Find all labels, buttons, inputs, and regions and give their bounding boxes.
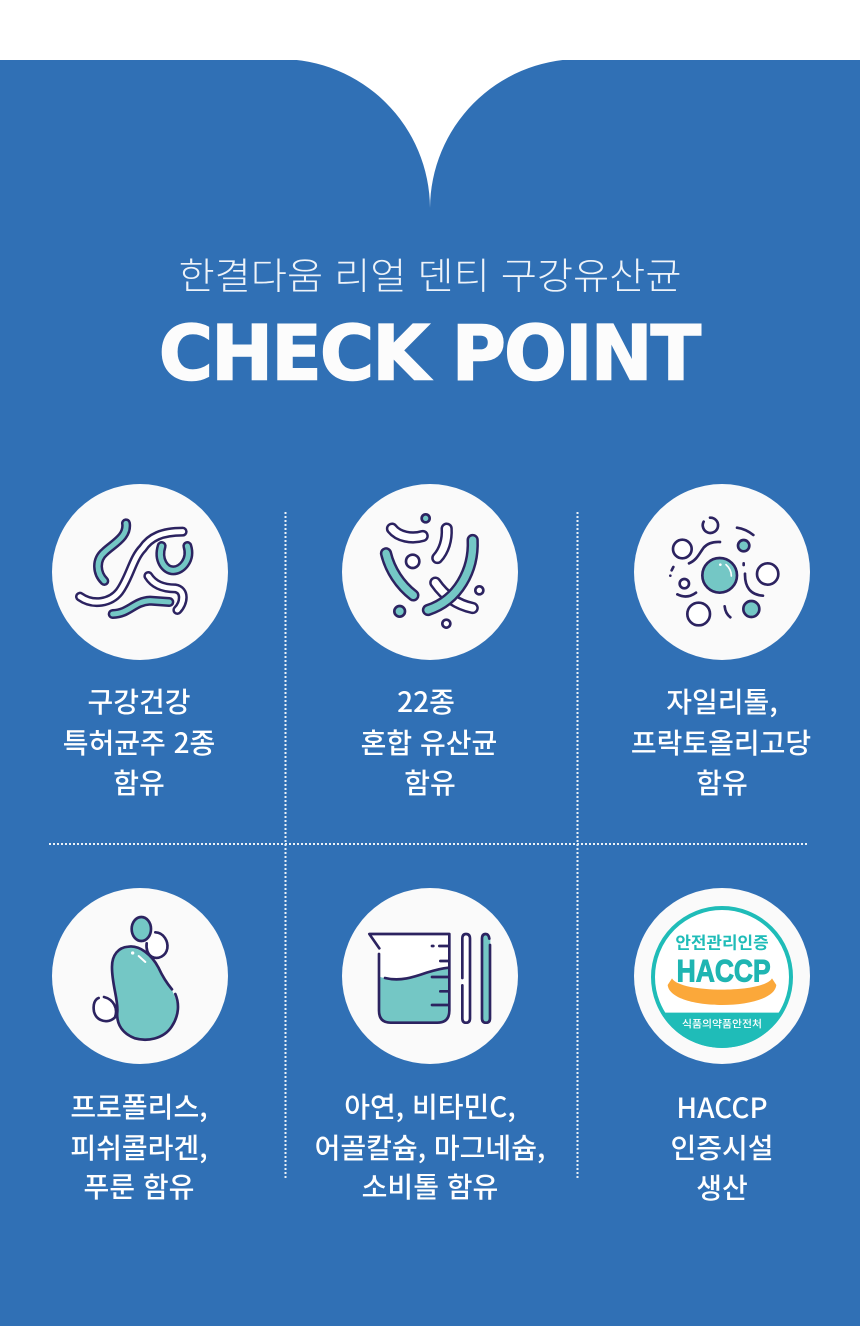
label: 함유 [696, 762, 748, 802]
label: 어골칼슘, 마그네슘, [315, 1127, 545, 1167]
label: HACCP [676, 1087, 768, 1127]
label: 프로폴리스, [70, 1086, 208, 1126]
label: 푸룬 함유 [84, 1166, 194, 1206]
label: 혼합 유산균 [361, 722, 497, 762]
icon: HACCP mark: 안전관리인증 [675, 929, 769, 953]
panel: xylitol and fructooligosaccharide [631, 484, 811, 802]
label: 소비톨 함유 [362, 1166, 498, 1206]
label: 22종 [397, 681, 455, 721]
icon: HACCP mark: 식품의약품안전처 [682, 1015, 762, 1030]
icon: beaker and test tubes [342, 888, 518, 1064]
panel: HACCP certified facility [634, 888, 810, 1207]
icon: HACCP mark [634, 888, 810, 1064]
panel: propolis, fish collagen [52, 888, 228, 1206]
label: 인증시설 [670, 1127, 774, 1167]
icon: bubbles [634, 484, 810, 660]
panel: oral health strains [52, 484, 228, 802]
label: 자일리톨, [666, 681, 778, 721]
label: 피쉬콜라겐, [70, 1127, 208, 1167]
label: 함유 [404, 762, 456, 802]
label: 프락토올리고당 [631, 722, 811, 762]
label: 생산 [696, 1167, 748, 1207]
panel: mixed probiotics [342, 484, 518, 802]
label: 구강건강 [87, 681, 191, 721]
icon: HACCP mark: HACCP [677, 954, 771, 989]
panel: zinc, vitamin C, minerals [315, 888, 545, 1206]
label: 아연, 비타민C, [344, 1086, 516, 1126]
icon: mixed bacteria [342, 484, 518, 660]
label: 함유 [113, 762, 165, 802]
icon: propolis drop [52, 888, 228, 1064]
title: CHECK POINT [159, 309, 701, 398]
label: 특허균주 2종 [63, 722, 215, 762]
top white notch [280, 59, 578, 208]
subtitle: 한결다움 리얼 덴티 구강유산균 [178, 246, 682, 300]
icon: curved bacteria [52, 484, 228, 660]
